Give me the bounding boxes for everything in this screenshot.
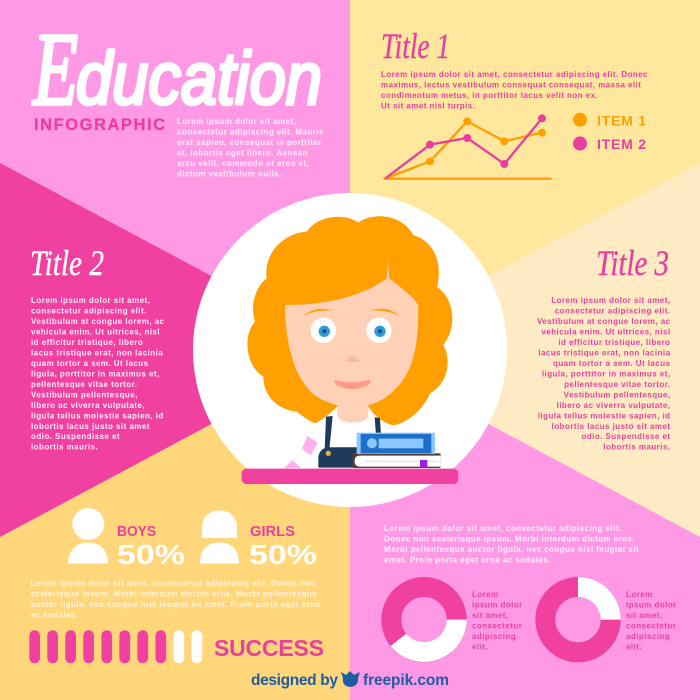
text block: bottom right: Donec non scelerisque ipsum. Morbi interdum dictum eros.: [384, 534, 635, 544]
overalls: [318, 447, 358, 468]
straps: [325, 416, 381, 450]
credit: freepik.com: freepik.com: [363, 672, 449, 689]
text block: title 3 body: odio. Suspendisse et: [581, 432, 670, 441]
title: Education: ducation: [76, 37, 322, 120]
stat: boys: [117, 524, 185, 570]
panel: top left background: [0, 0, 350, 350]
icon: girl: [200, 510, 239, 564]
text block: bottom right: [384, 524, 639, 564]
text block: title 1 body: Lorem ipsum dolor sit amet, consectetur adipiscing elit. Donec: [381, 70, 648, 79]
donut 2 caption: elit.: [626, 642, 642, 652]
text block: bottom right: Lorem ipsum dolor sit amet, consectetur adipiscing elit.: [384, 524, 622, 533]
central white circle: [193, 193, 507, 507]
paper scraps: [284, 436, 318, 468]
title: Education: E: [32, 12, 78, 127]
face: [285, 261, 418, 407]
line chart: [383, 114, 552, 179]
text block: intro: erat sapien, consequat in porttitor: [177, 138, 322, 147]
text block: title 3 body: Vestibulum at congue lorem, ac: [537, 317, 671, 326]
text block: title 2 body: lobortis lacus justo sit amet: [31, 422, 150, 431]
donut 1 caption: consectetur: [472, 622, 522, 630]
donut 2 caption: ipsum dolor: [626, 600, 677, 610]
text block: title 1 body: [381, 70, 648, 110]
text block: title 2 body: id efficitur tristique, libero: [31, 338, 143, 347]
donut 1 caption: Lorem: [472, 590, 499, 599]
subtitle: Infographic: INFOGRAPHIC: [34, 116, 165, 134]
text block: title 3 body: lobortis mauris.: [603, 443, 670, 452]
text block: title 2 body: ligula, porttitor in maximus et,: [31, 369, 160, 378]
text block: title 3 body: consectetur adipiscing elit.: [555, 306, 670, 316]
text block: title 3 body: pellentesque vitae tortor.: [564, 380, 670, 389]
icon: freepik logo: [341, 671, 360, 687]
desk: [242, 469, 458, 484]
neck: [337, 400, 368, 423]
text block: bottom right: Morbi pellentesque auctor ligula, nec congue nisl feugiat sit: [384, 545, 639, 554]
text block: intro: et, lobortis eget libero. Aenean: [177, 148, 308, 158]
text block: title 2 body: lacus tristique erat, non lacinia: [31, 348, 163, 357]
text block: title 2 body: Lorem ipsum dolor sit amet,: [31, 296, 150, 305]
panel: bottom right background: [350, 350, 700, 700]
panel: bottom left background: [0, 350, 350, 700]
heading: Title 3: Title 3: [596, 243, 669, 283]
legend: item 2: [573, 136, 646, 152]
eyebrows: [303, 309, 400, 316]
stat: boys: 50%: [117, 539, 185, 570]
text block: title 3 body: vehicula enim. Ut ultrices, nisl: [541, 327, 670, 336]
icon: boy: [68, 508, 108, 564]
donut 2 caption: consectetur: [626, 622, 676, 630]
donut 1 caption: sit amet,: [472, 611, 509, 620]
text block: title 2 body: Vestibulum at congue lorem, ac: [31, 317, 165, 326]
donut chart 2: [545, 577, 621, 652]
text block: title 2 body: Vestibulum pellentesque,: [31, 390, 138, 399]
donut 1 caption: elit.: [472, 642, 488, 652]
text block: intro: consectetur adipiscing elit. Mauris: [177, 128, 324, 136]
label: success: SUCCESS: [214, 635, 324, 661]
text block: title 2 body: quam tortor a sem. Ut lacus: [31, 359, 149, 368]
text block: title 3 body: ligula tellus molestie sapien, id: [538, 411, 670, 420]
donut 1 caption: adipiscing: [472, 632, 516, 641]
text block: title 2 body: pellentesque vitae tortor.: [31, 380, 137, 389]
legend: item 1: ITEM 1: [597, 112, 646, 128]
text block: title 1 body: Ut sit amet nisl turpis.: [381, 102, 475, 110]
stat: boys: BOYS: [117, 524, 156, 540]
text block: intro: Lorem ipsum dolor sit amet,: [177, 117, 296, 126]
donut 2 caption: Lorem: [626, 590, 653, 599]
donut 1 caption: ipsum dolor: [472, 600, 523, 610]
text block: intro: [177, 117, 324, 178]
illustration: girl with books: [242, 216, 458, 484]
text block: title 3 body: lacus tristique erat, non lacinia: [538, 348, 671, 357]
credit: designed by: designed by: [251, 672, 338, 689]
hair: [247, 216, 452, 425]
heading: Title 1: Title 1: [381, 26, 450, 66]
panel: top right background: [350, 0, 700, 350]
text block: title 3 body: lobortis lacus justo sit amet: [552, 422, 670, 431]
donut 1 caption: [472, 590, 523, 652]
stat: girls: [249, 524, 317, 570]
text block: title 3 body: id efficitur tristique, libero: [558, 338, 670, 347]
text block: bottom left: [30, 579, 321, 620]
text block: bottom left: scelerisque ipsum. Morbi interdum dictum eros. Morbi pellentesque: [30, 590, 317, 598]
text block: title 2 body: vehicula enim. Ut ultrices, nisl: [31, 327, 160, 336]
legend: item 1: [573, 112, 646, 128]
text block: intro: dictum vestibulum nulla.: [177, 170, 282, 178]
text block: title 1 body: maximus, lectus vestibulum consequat consequat, massa elit: [381, 80, 641, 90]
text block: bottom left: auctor ligula, nec congue nisl feugiat sit amet. Proin porta eget urna: [30, 600, 321, 609]
text block: title 2 body: libero ac viverra vulputate,: [31, 401, 145, 410]
stat: girls: 50%: [249, 539, 317, 570]
text block: title 1 body: condimentum metus, in porttitor lacus velit non ex.: [381, 91, 598, 100]
panel: right wedge: [350, 163, 700, 537]
donut 2 caption: sit amet,: [626, 611, 663, 620]
upper book: [357, 433, 435, 454]
donut chart 1: [391, 587, 467, 662]
donut 2 caption: adipiscing: [626, 632, 670, 641]
text block: bottom left: ac sodales.: [30, 610, 79, 620]
text block: bottom left: Lorem ipsum dolor sit amet, consectetur adipiscing elit. Donec non: [30, 579, 316, 588]
text block: title 3 body: ligula, porttitor in maximus et,: [542, 369, 670, 378]
progress bar: success pills: [29, 630, 202, 663]
text block: bottom right: amet. Proin porta eget urna ac sodales.: [384, 556, 551, 564]
text block: title 3 body: libero ac viverra vulputate,: [557, 401, 670, 410]
text block: title 3 body: quam tortor a sem. Ut lacus: [553, 359, 671, 368]
text block: title 3 body: [537, 296, 671, 452]
text block: title 3 body: Lorem ipsum dolor sit amet,: [551, 296, 670, 305]
mouth: [335, 379, 370, 389]
title: Education: [32, 12, 322, 127]
text block: intro: arcu velit, commodo ut eros et,: [177, 159, 309, 168]
nose: [345, 356, 360, 362]
text block: title 3 body: Vestibulum pellentesque,: [564, 390, 670, 399]
panel: left wedge: [0, 163, 350, 537]
text block: title 2 body: consectetur adipiscing elit.: [31, 306, 147, 316]
heading: Title 2: Title 2: [30, 243, 104, 283]
text block: title 2 body: ligula tellus molestie sapien, id: [31, 411, 164, 420]
text block: title 2 body: [31, 296, 165, 452]
stat: girls: GIRLS: [250, 524, 295, 540]
eyes: [311, 318, 392, 343]
text block: title 2 body: lobortis mauris.: [31, 443, 98, 452]
lower book: [353, 453, 441, 468]
legend: item 2: ITEM 2: [597, 136, 646, 152]
donut 2 caption: [626, 590, 677, 652]
text block: title 2 body: odio. Suspendisse et: [31, 432, 120, 441]
